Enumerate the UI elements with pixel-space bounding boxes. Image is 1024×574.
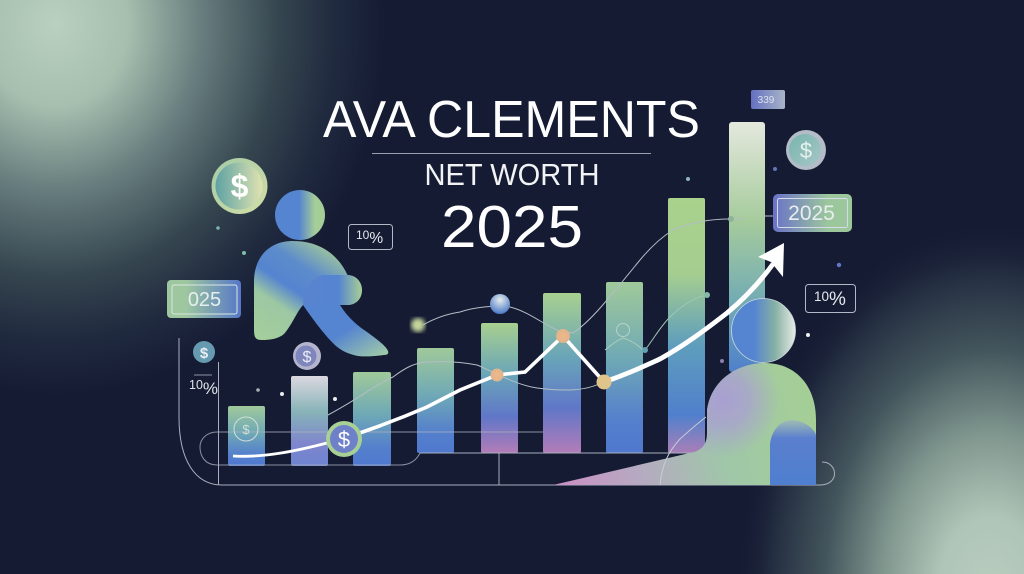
decorative dots [216,167,841,401]
tag: 2025: 2025 [788,202,835,225]
icon: small coin in bar [234,417,258,441]
tag: top: 339 [758,95,775,106]
label: 10 percent upper left: 10 [356,228,369,242]
title: AVA CLEMENTS [323,91,700,149]
bar chart [228,122,765,466]
coin: trend dollar [326,421,362,457]
tag: 2025 [773,194,852,232]
label: 10 percent upper left: % [369,230,383,247]
coin: top left dollar: $ [231,168,249,204]
tag: 025: 025 [188,289,221,311]
coin: trend dollar: $ [338,427,350,452]
label: 10 percent right: 10 [814,289,829,304]
title divider [372,152,651,154]
label: 10 percent left [189,375,218,398]
subtitle: NET WORTH [424,158,600,192]
coin: small bar dollar [293,342,321,370]
label: 10 percent left: % [203,379,218,398]
tag: 025 [167,280,241,318]
coin: top left dollar [212,158,268,214]
icon: small coin in bar: $ [242,422,250,437]
trend arrow [233,243,784,456]
person: seated left figure [254,190,388,356]
label: 10 percent right [806,284,856,312]
coin: small left dollar [193,341,215,363]
label: 10 percent upper left [348,224,392,250]
trend nodes [411,294,612,390]
axis frame [179,338,834,485]
year: 2025 [441,194,583,260]
coin: small bar dollar: $ [303,349,312,366]
coin: top right dollar: $ [800,138,812,163]
coin: top right dollar [786,130,826,170]
label: 10 percent right: % [829,289,846,310]
thin trend curves [328,216,773,415]
person: right figure [553,298,816,485]
label: 10 percent left: 10 [189,378,203,392]
tag: top [751,90,785,109]
coin: small left dollar: $ [200,345,209,362]
